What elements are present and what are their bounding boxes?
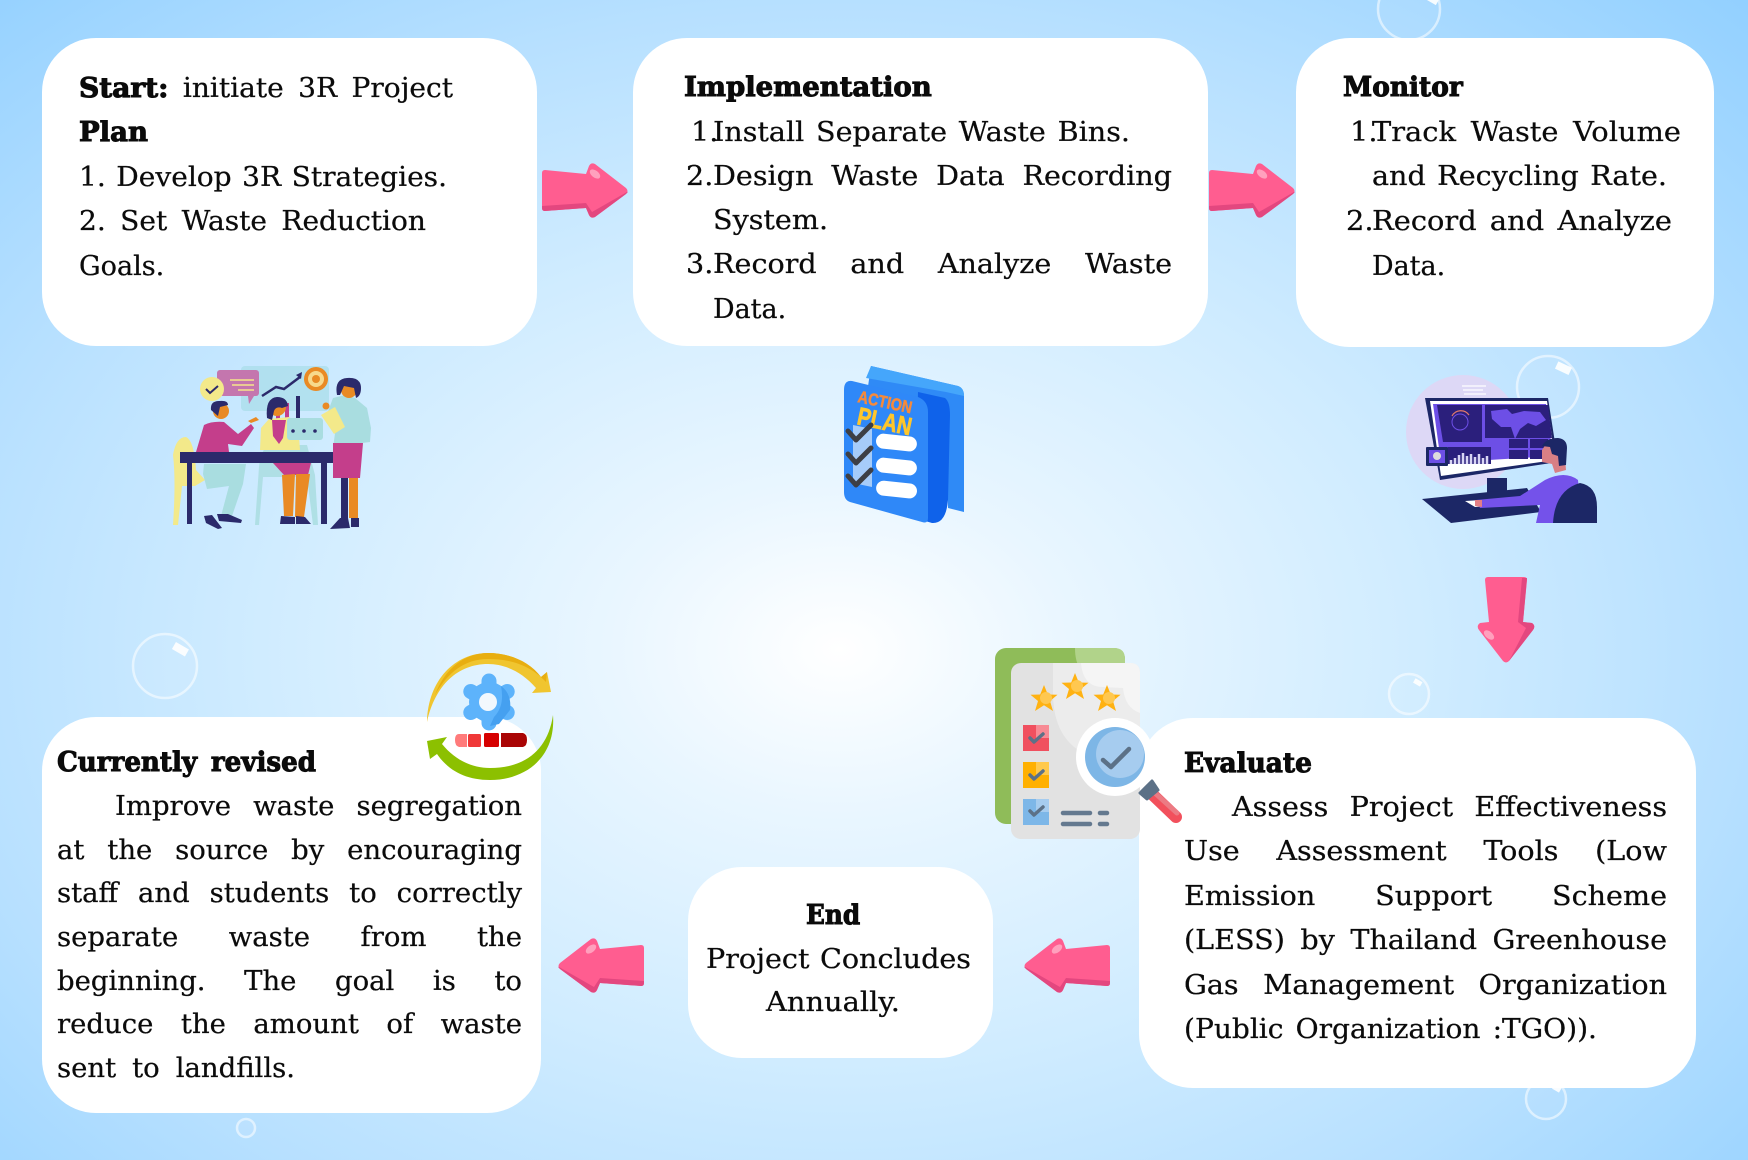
text: plan steps [79,161,447,282]
text: evaluation description: Assess Project Effectiveness [1232,791,1667,823]
icon: action plan clipboard: PLAN [855,402,914,441]
text: evaluation description [1184,791,1667,1045]
text: evaluation description: Use Assessment Tools (Low [1184,835,1667,867]
text: monitor steps: 1. [1350,116,1378,148]
icon: action plan clipboard [844,366,964,523]
text: revision description: staff and students to correctly [57,877,522,909]
panel: implementation [633,38,1208,346]
text: project concludes annually: Project Concludes [706,943,971,975]
text: implementation steps: System. [713,204,828,236]
panel: monitor [1296,38,1714,347]
icon: continuous improvement cycle with gear [427,653,553,780]
text: revision description [57,790,522,1084]
text: evaluation description: (Public Organization :TGO)). [1184,1013,1597,1045]
text: revision description: beginning. The goal is to [57,965,522,997]
text: plan steps: 2. Set Waste Reduction [79,205,426,237]
arrow: evaluate to end [1024,938,1110,993]
text: monitor steps: Record and Analyze [1372,205,1672,237]
text: monitor steps: 2. [1346,205,1374,237]
arrow: plan to implementation [542,163,628,218]
text: implementation steps: Record and Analyze Waste [713,248,1172,280]
panel: currently revised [42,717,541,1113]
arrow: monitor to evaluate [1478,577,1534,662]
panel: start and plan [42,38,537,346]
heading: start: Start: initiate 3R Project [79,72,453,104]
text: monitor steps: Track Waste Volume [1372,116,1681,148]
text: implementation steps: 2. [686,160,713,192]
icon: person at monitoring screen [1406,375,1597,523]
heading: end: End [806,899,860,931]
text: monitor steps [1346,116,1681,282]
heading: monitor: Monitor [1343,71,1463,103]
text: revision description: separate waste from the [57,921,522,953]
text: monitor steps: and Recycling Rate. [1372,160,1667,192]
text: plan steps: Goals. [79,250,164,282]
text: implementation steps: Design Waste Data Recording [713,160,1172,192]
text: project concludes annually [706,943,971,1018]
text: revision description: sent to landfills. [57,1052,295,1084]
heading: plan: Plan [79,116,148,148]
heading: implementation: Implementation [684,71,932,103]
text: revision description: reduce the amount of waste [57,1008,522,1040]
text: plan steps: 1. Develop 3R Strategies. [79,161,447,193]
label text on clipboard: ACTION [856,387,914,417]
arrow: implementation to monitor [1209,163,1295,218]
text: project concludes annually: Annually. [766,986,900,1018]
text: implementation steps [686,116,1172,325]
arrow: end to currently revised [558,938,644,993]
text: evaluation description: Emission Support Scheme [1184,880,1667,912]
text: implementation steps: 1. [691,116,718,148]
heading: evaluate: Evaluate [1184,747,1312,779]
text: implementation steps: 3. [686,248,713,280]
text: monitor steps: Data. [1372,250,1445,282]
text: evaluation description: (LESS) by Thailand Greenhouse [1184,924,1667,956]
red progress bar [455,733,527,747]
text: implementation steps: Install Separate Waste Bins. [713,116,1130,148]
icon: evaluation checklist with magnifier [995,648,1177,839]
text: revision description: Improve waste segregation [115,790,522,822]
icon: team meeting around a table [173,366,371,529]
heading: currently revised: Currently revised [57,746,316,778]
panel: evaluate [1139,718,1696,1088]
text: revision description: at the source by encouraging [57,834,522,866]
panel: end [688,867,993,1058]
icon: three rating stars [1030,673,1120,711]
text: evaluation description: Gas Management Organization [1184,969,1667,1001]
text: implementation steps: Data. [713,293,786,325]
